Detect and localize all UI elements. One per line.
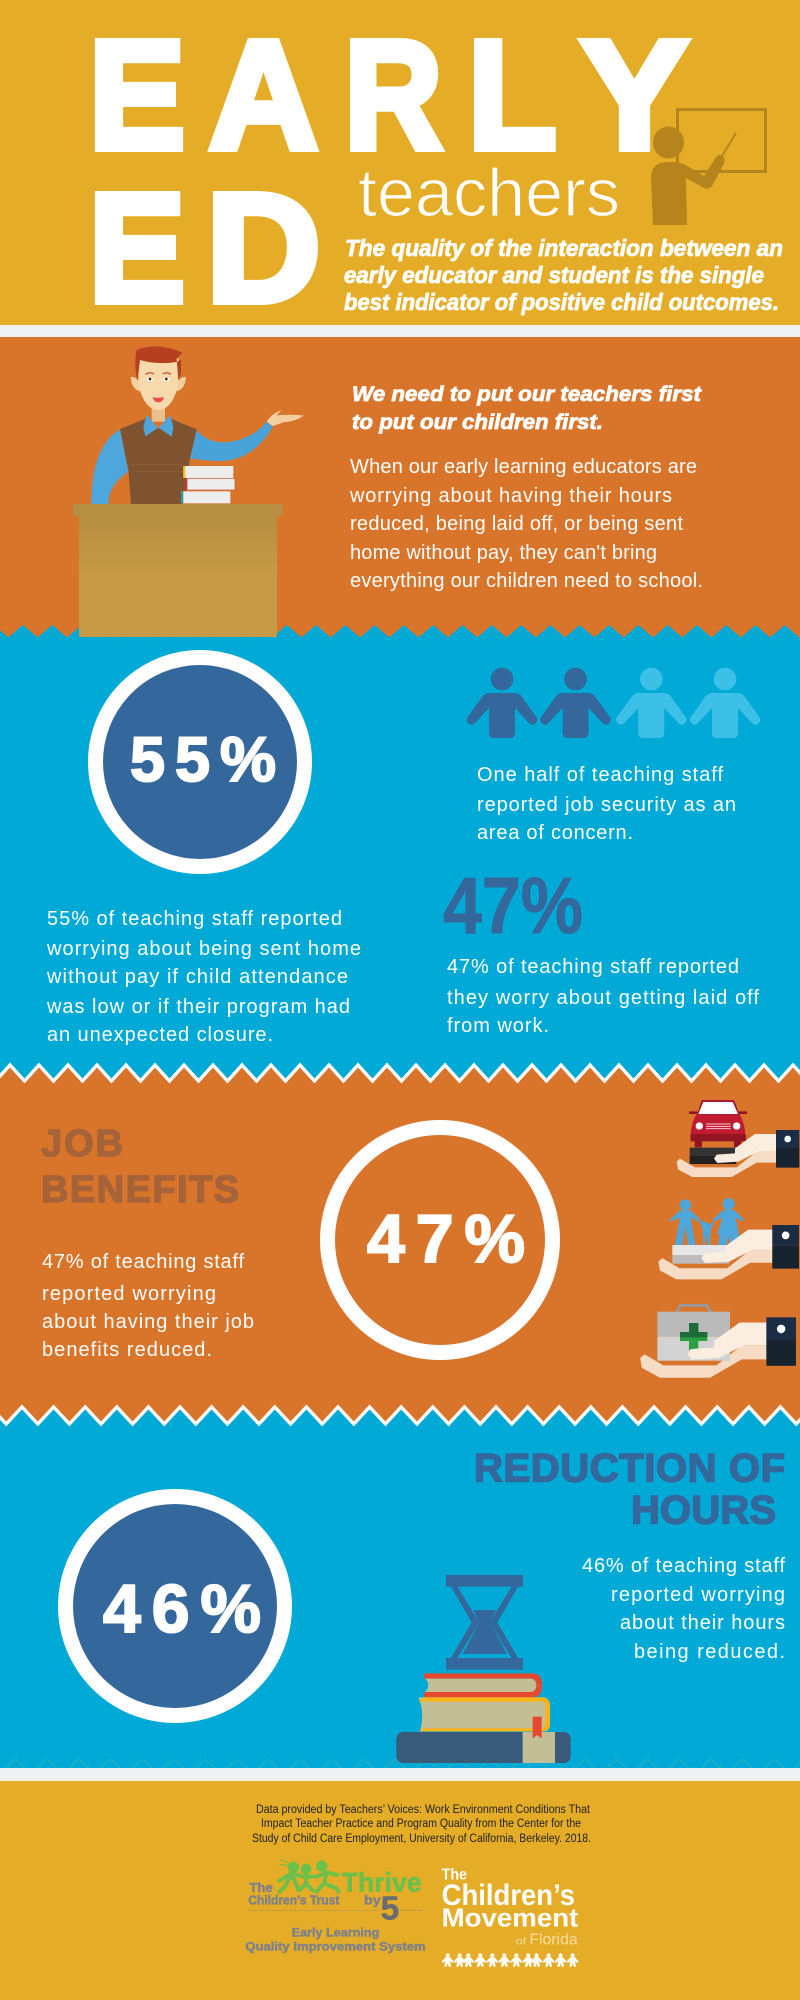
tagline: The quality of the interaction between an [345,235,783,261]
text: job security: One half of teaching staff [477,764,723,786]
paragraph: home without pay, they can't bring [350,542,657,564]
text: reduced hours: reported worrying [611,1584,785,1606]
text: job security [477,764,736,844]
title: EARLY ED: A [209,10,318,181]
text: laid off: 47% of teaching staff reported [447,956,739,978]
text: job benefits: 47% of teaching staff [42,1251,244,1273]
logo: Children's Trust and Thrive by 5: Early Learning [292,1926,379,1940]
text: reduced hours: being reduced. [634,1641,785,1663]
eyes [146,373,171,381]
heading: job benefits: JOB [41,1123,123,1165]
paragraph [349,456,703,592]
text: job security: area of concern. [477,822,633,844]
logo: Children's Trust and Thrive by 5: 5 [381,1890,399,1927]
source note: Impact Teacher Practice and Program Quality from the Center for the [261,1818,581,1830]
text: reduced hours [582,1555,785,1663]
heading: reduction of hours [474,1446,785,1532]
hand with first aid kit [640,1305,796,1378]
face [138,358,178,410]
text: 55% stat: without pay if child attendance [46,966,348,988]
hand with family [658,1198,799,1279]
paragraph: worrying about having their hours [349,485,672,507]
subtitle: teachers: teachers [358,155,620,231]
text: job benefits: benefits reduced. [42,1339,212,1361]
hourglass [446,1575,523,1670]
heading: reduction of hours: HOURS [631,1488,776,1532]
tagline: best indicator of positive child outcomes. [344,289,779,315]
logo: The Children's Movement of Florida: of [516,1936,527,1947]
text: reduced hours: 46% of teaching staff [582,1555,785,1577]
logo: Children's Trust and Thrive by 5: by [364,1892,381,1907]
paragraph: reduced, being laid off, or being sent [350,513,683,535]
text: job benefits [42,1251,254,1361]
mouth [153,397,164,402]
title: EARLY ED: R [344,9,442,181]
illustration: teacher at desk [73,346,304,637]
stat circle: 55% [96,658,304,866]
logo: The Children's Movement of Florida: Children’s [442,1879,575,1912]
text: laid off [447,956,759,1037]
title: EARLY ED [89,9,688,335]
hair [135,346,183,380]
source note: Study of Child Care Employment, University of California, Berkeley. 2018. [252,1833,591,1845]
stat: 47% laid off: 47% [443,861,583,950]
paragraph: everything our children need to school. [350,570,703,592]
stat circle: 47%: 47% [367,1201,525,1277]
heading: reduction of hours: REDUCTION OF [474,1446,785,1490]
logo: Children's Trust and Thrive by 5: Children’s Trust [248,1892,340,1907]
neck [152,405,165,422]
logo: Children's Trust and Thrive by 5: Quality Improvement System [245,1940,426,1954]
illustration: hands with benefits [640,1100,799,1378]
logo: The Children's Movement of Florida: Florida [529,1931,578,1948]
text: 55% stat: 55% of teaching staff reported [47,908,342,930]
logo: The Children's Movement of Florida [442,1866,579,1967]
stat circle: 46%: 46% [103,1571,261,1647]
icon: teacher at board [651,110,766,225]
source note [252,1804,591,1845]
paper people [442,1953,579,1967]
logo: Children's Trust and Thrive by 5: Thrive [342,1868,422,1898]
logo: The Children's Movement of Florida: Movement [442,1903,579,1933]
text: 55% stat [46,908,361,1046]
source note: Data provided by Teachers’ Voices: Work Environment Conditions That [256,1804,591,1816]
hand with car [677,1100,799,1177]
vest [120,418,197,504]
heading: to put our children first. [352,410,603,434]
title: EARLY ED: E [89,162,185,334]
tagline: early educator and student is the single [344,262,764,288]
tagline [344,235,783,315]
green kids [279,1860,338,1892]
title: EARLY ED: D [206,163,320,335]
stat circle: 55%: 55% [130,725,276,795]
stat circle: 46% [66,1496,284,1716]
text: reduced hours: about their hours [620,1612,785,1634]
books [396,1673,571,1763]
logo: The Children's Movement of Florida: The [442,1866,467,1883]
text: job benefits: reported worrying [42,1283,216,1305]
text: 55% stat: was low or if their program had [46,996,350,1018]
heading: We need to put our teachers first [352,382,702,406]
family [669,1198,744,1245]
text: laid off: from work. [447,1015,549,1037]
heading: job benefits: BENEFITS [41,1169,239,1211]
text: job security: reported job security as an [477,794,736,816]
logo: Children's Trust and Thrive by 5: The [249,1880,273,1895]
logo: Children's Trust and Thrive by 5 [245,1860,426,1954]
car [689,1100,747,1147]
title: EARLY ED: E [89,9,185,181]
text: 55% stat: worrying about being sent home [46,938,361,960]
text: job benefits: about having their job [42,1311,254,1333]
heading [352,382,702,434]
title: EARLY ED: L [468,9,556,181]
icon: people one half [467,668,760,738]
books [181,466,235,503]
collar [143,415,173,437]
title: EARLY ED: Y [581,10,688,181]
paragraph: When our early learning educators are [350,456,697,478]
text: laid off: they worry about getting laid off [447,987,759,1009]
text: put our teachers first [349,382,703,592]
left arm [91,429,128,504]
stat circle: 47% [328,1128,552,1352]
hand [267,410,304,426]
ears [131,377,186,391]
right arm [190,422,273,461]
illustration: hourglass on books [396,1575,571,1763]
heading: job benefits [41,1123,239,1211]
vest pattern [129,464,183,472]
text: 55% stat: an unexpected closure. [47,1024,273,1046]
